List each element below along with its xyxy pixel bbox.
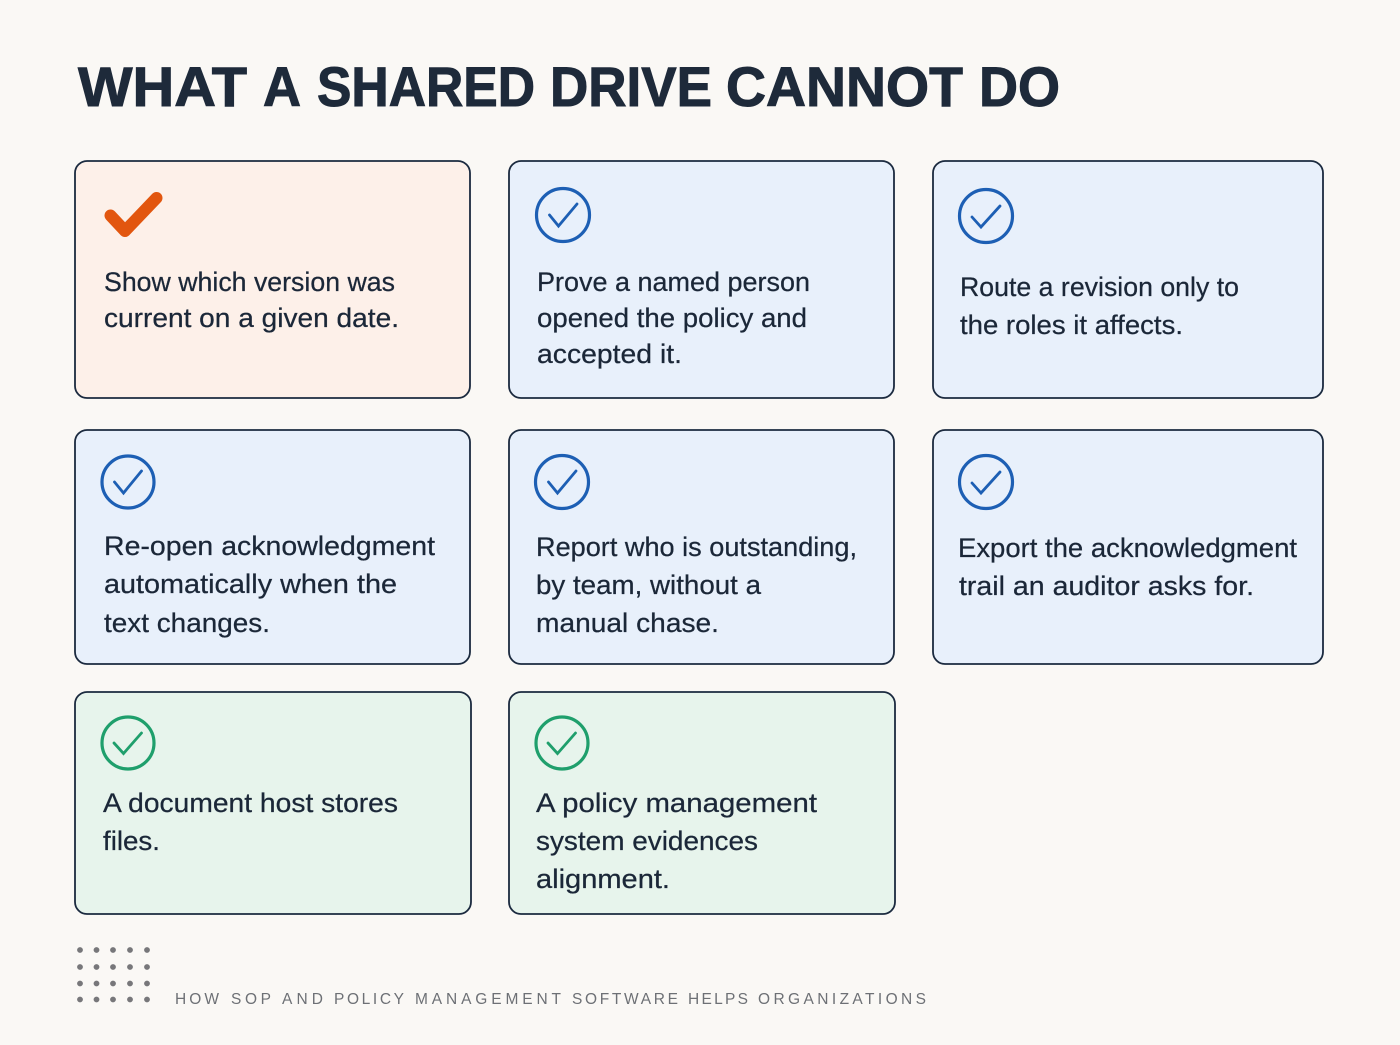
text: export statement: Export the acknowledgment xyxy=(958,533,1297,563)
title: A xyxy=(263,55,301,118)
title xyxy=(78,55,1060,118)
panel: version on a given date xyxy=(75,161,470,398)
panel: document host xyxy=(75,692,471,914)
footer caption: MANAGEMENT xyxy=(415,991,562,1008)
text: policy system statement: A policy management xyxy=(536,788,818,818)
footer caption: SOP xyxy=(231,991,271,1008)
panel: policy management system xyxy=(509,692,895,914)
footer caption: HOW xyxy=(175,991,219,1008)
text: reporting statement xyxy=(536,532,857,638)
text: re-open statement: Re-open acknowledgment xyxy=(104,531,436,561)
text: document host statement xyxy=(103,788,398,856)
icon: green check circle xyxy=(102,717,154,769)
text: version statement: Show which version was xyxy=(104,267,395,297)
text: policy system statement xyxy=(536,788,818,894)
title: DRIVE xyxy=(550,55,712,118)
footer caption: AND xyxy=(282,991,323,1008)
footer caption: HELPS xyxy=(688,991,748,1008)
text: policy system statement: system evidences xyxy=(536,826,758,856)
icon: green check circle xyxy=(536,717,588,769)
text: routing statement: the roles it affects. xyxy=(960,310,1183,340)
text: export statement: trail an auditor asks for. xyxy=(959,571,1254,601)
footer caption xyxy=(175,991,926,1008)
text: version statement: current on a given date. xyxy=(104,303,399,333)
text: re-open statement: automatically when the xyxy=(104,569,397,599)
text: acceptance statement: Prove a named person xyxy=(537,267,810,297)
icon: blue check circle xyxy=(536,188,590,242)
text: acceptance statement xyxy=(537,267,810,369)
title: DO xyxy=(979,55,1060,118)
text: acceptance statement: accepted it. xyxy=(537,339,682,369)
icon: blue check circle xyxy=(960,456,1012,508)
footer caption: SOFTWARE xyxy=(572,991,678,1008)
text: acceptance statement: opened the policy and xyxy=(537,303,807,333)
panel: re-open acknowledgment xyxy=(75,430,470,664)
panel: route revisions xyxy=(933,161,1323,398)
title: CANNOT xyxy=(726,55,963,118)
panel: report outstanding xyxy=(509,430,894,664)
text: reporting statement: manual chase. xyxy=(536,608,719,638)
text: routing statement xyxy=(960,272,1239,340)
text: version statement xyxy=(104,267,399,333)
text: routing statement: Route a revision only to xyxy=(960,272,1239,302)
footer dot grid xyxy=(77,947,150,1002)
panel: named person acceptance xyxy=(509,161,894,398)
text: reporting statement: Report who is outstanding, xyxy=(536,532,857,562)
footer caption: POLICY xyxy=(334,991,404,1008)
title: WHAT xyxy=(78,55,247,118)
text: re-open statement: text changes. xyxy=(104,608,270,638)
text: policy system statement: alignment. xyxy=(536,864,670,894)
icon: blue check circle xyxy=(536,456,588,508)
icon: orange check mark xyxy=(110,198,156,231)
panel: export trail xyxy=(933,430,1323,664)
text: reporting statement: by team, without a xyxy=(536,570,762,600)
text: re-open statement xyxy=(104,531,436,638)
text: document host statement: files. xyxy=(103,826,160,856)
title: SHARED xyxy=(317,55,535,118)
icon: blue check circle xyxy=(102,456,154,508)
icon: blue check circle xyxy=(960,190,1012,242)
footer caption: ORGANIZATIONS xyxy=(758,991,926,1008)
text: document host statement: A document host stores xyxy=(103,788,398,818)
text: export statement xyxy=(958,533,1297,601)
